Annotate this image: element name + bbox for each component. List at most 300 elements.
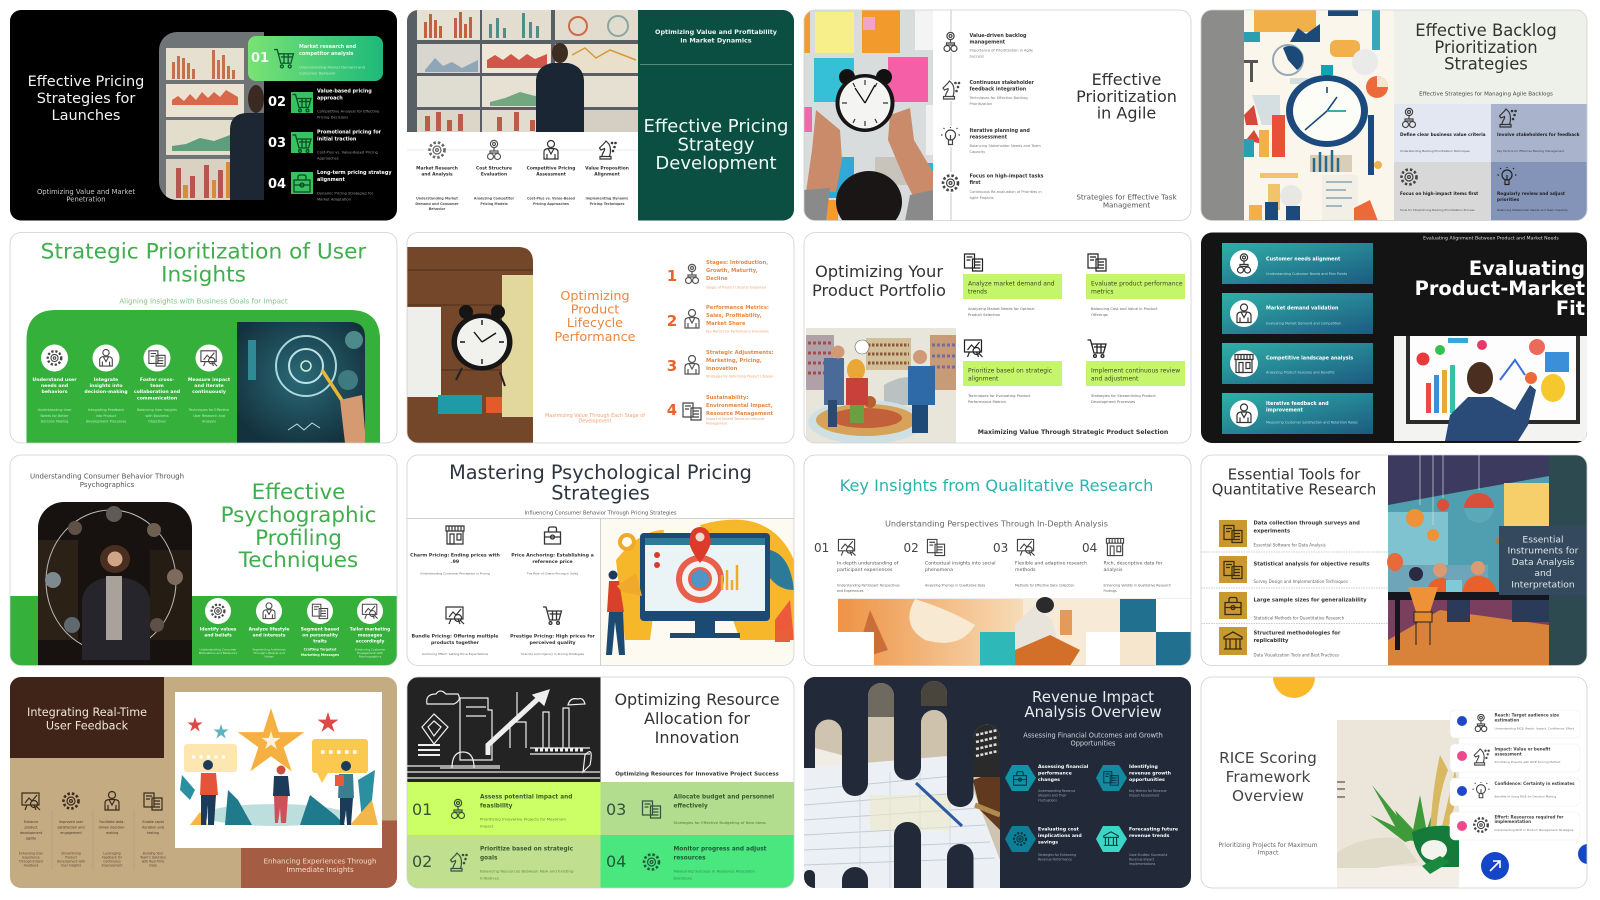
callout panel: Data Analysis xyxy=(1512,557,1575,568)
item 3: Innovation xyxy=(706,366,738,372)
item 2: reference price xyxy=(532,559,573,565)
benefit 2: User Insights xyxy=(61,864,81,868)
title: Techniques xyxy=(238,548,358,573)
item 3: Iterative planning and xyxy=(970,128,1030,134)
cell 03: effectively xyxy=(674,804,708,810)
item 02 xyxy=(268,88,380,120)
title: Psychographic xyxy=(221,503,376,528)
item 1 xyxy=(1005,764,1089,802)
cell 4: Regularly review and adjust xyxy=(1497,191,1565,197)
item 2 xyxy=(667,305,769,334)
benefit 1: Through Instant xyxy=(18,860,44,864)
cell 01: Impact xyxy=(480,824,494,828)
item 2: Performance Metrics: xyxy=(706,305,769,311)
button: arrow xyxy=(1481,852,1509,880)
step 2: Analyzing Competitor xyxy=(474,196,514,200)
item 04 xyxy=(268,170,392,202)
item 03: Approaches xyxy=(317,156,339,160)
cell 3 xyxy=(1394,162,1491,221)
cell 4: Balancing Stakeholder Needs and Team Capacity xyxy=(1497,208,1568,212)
step 01: 01 xyxy=(814,541,829,555)
slide 16 border xyxy=(1201,677,1587,888)
title: Quantitative Research xyxy=(1212,482,1376,498)
card: confidence xyxy=(1450,778,1580,806)
title: Prioritization xyxy=(1434,38,1538,57)
card: effort xyxy=(1450,812,1580,840)
tool 4 xyxy=(1219,627,1341,658)
panel: slide 2 pricing strategy development xyxy=(407,10,794,220)
item 2: 2 xyxy=(667,312,677,330)
card 4: and adjustment xyxy=(1091,376,1139,382)
card 3: Competitive landscape analysis xyxy=(1266,356,1353,362)
card 4: Measuring Customer Satisfaction and Retention Rates xyxy=(1266,420,1358,424)
benefit 1: Experience xyxy=(22,856,40,860)
step 4: Value Proposition xyxy=(585,166,629,172)
card 01: 01 xyxy=(251,51,269,66)
cell 04: Monitor progress and adjust xyxy=(674,846,767,852)
illustration: people around rating star xyxy=(175,692,382,848)
cell 2: Involve stakeholders for feedback xyxy=(1497,132,1580,138)
item 4 xyxy=(667,395,774,426)
card 3: Performance Metrics xyxy=(968,400,1006,404)
panel: slide 10 psychological pricing xyxy=(407,455,794,666)
item 3 xyxy=(1005,826,1082,862)
cell 01: 01 xyxy=(412,800,432,819)
green panel xyxy=(26,310,380,450)
title: Innovation xyxy=(655,728,739,747)
step 4: Alignment xyxy=(594,172,620,178)
item 2: Sales, Profitability, xyxy=(706,313,762,319)
column 2: Integrating Feedback xyxy=(88,408,124,412)
step 01: Understanding Participant Perspectives xyxy=(837,584,900,588)
panel: slide 7 product portfolio xyxy=(804,232,1191,444)
tool 1 xyxy=(1219,520,1360,548)
slide 6 border xyxy=(407,232,794,443)
column 3: Crafting Targeted xyxy=(304,648,337,652)
item 4: Focus on high-impact tasks xyxy=(970,174,1044,180)
column 4: and iterate xyxy=(194,383,224,389)
column 3: Balancing User Insights xyxy=(137,408,177,412)
benefit 4: Building Your xyxy=(143,852,164,856)
item 2: Identifying xyxy=(1129,764,1158,770)
column 1: Needs for Better xyxy=(40,414,69,418)
card 3: alignment xyxy=(968,376,999,382)
item 03: Cost-Plus vs. Value-Based Pricing xyxy=(317,150,378,154)
panel: slide 3 prioritization in agile xyxy=(804,10,1191,233)
tool 4: Structured methodologies for xyxy=(1254,630,1341,636)
step 01: and Experiences xyxy=(837,589,864,593)
card 3 xyxy=(1222,343,1373,384)
step 3: Competitive Pricing xyxy=(527,166,575,172)
benefit 3: driven decision- xyxy=(98,826,126,830)
column 4: Tailor marketing xyxy=(350,626,390,632)
benefit 4: Enable rapid xyxy=(142,820,164,824)
card: reach: estimation xyxy=(1494,718,1519,722)
step 01: participant experiences xyxy=(837,567,893,573)
item 3: Strategic Adjustments: xyxy=(706,350,774,356)
step 2 xyxy=(474,140,514,206)
title: Revenue Impact xyxy=(1032,688,1154,706)
title: Development xyxy=(655,153,777,174)
card 01 xyxy=(248,36,383,81)
column 3: with Business xyxy=(145,414,169,418)
card 4 xyxy=(1222,393,1373,434)
photo: woman in network of people xyxy=(38,502,192,672)
cell 2 xyxy=(1491,104,1587,162)
slide 5 border xyxy=(10,232,397,443)
subtitle: Strategies for Effective Task xyxy=(1076,192,1177,202)
panel: slide 5 user insights xyxy=(26,242,380,443)
illustration: line-art growth arrow xyxy=(407,677,600,782)
cell 02: Balancing Resources Between New and Existing xyxy=(480,868,574,874)
card 1: Customer needs alignment xyxy=(1266,256,1341,262)
tool 2: Survey Design and Implementation Techniques xyxy=(1254,579,1348,584)
item 4: Management xyxy=(706,422,728,426)
benefit 2 xyxy=(57,794,85,868)
step 03: Flexible and adaptive research xyxy=(1015,560,1087,566)
cell 02 xyxy=(407,835,600,888)
card: reach xyxy=(1450,710,1580,738)
item 3: 3 xyxy=(667,357,677,375)
green band xyxy=(10,596,397,666)
item 1: 1 xyxy=(667,267,677,285)
title: Strategies xyxy=(551,482,650,504)
benefit 1: development xyxy=(20,831,43,835)
slide 7 border xyxy=(804,232,1191,443)
card: reach: Understanding RICE: Reach, Impact, Confidence, Effort xyxy=(1494,726,1575,730)
cell 01: Assess potential impact and xyxy=(480,794,572,800)
title: Insights xyxy=(161,262,246,288)
subtitle: Optimizing Value and Market xyxy=(37,188,135,196)
column 2: Values xyxy=(264,654,274,658)
card 4 xyxy=(1086,340,1185,404)
subtitle: Psychographics xyxy=(80,481,135,489)
step 1 xyxy=(415,142,459,211)
slide 4 border xyxy=(1201,10,1587,220)
card 1 xyxy=(1222,243,1373,284)
title: Mastering Psychological Pricing xyxy=(449,461,752,484)
card 01: competitor analysis xyxy=(299,51,354,57)
benefit 4: Team's Solutions xyxy=(139,856,166,860)
step 4: Implementing Dynamic xyxy=(586,196,629,200)
rust callout xyxy=(241,820,397,888)
card 1: Understanding Customer Needs and Pain Points xyxy=(1266,272,1347,276)
slide 14 border xyxy=(407,677,794,888)
step 01: In-depth understanding of xyxy=(837,560,899,566)
callout panel: Interpretation xyxy=(1511,580,1575,590)
item 2: Continuous stakeholder xyxy=(970,80,1034,86)
item 3: Strategies for Optimizing Product Lifespan xyxy=(706,374,773,378)
title: Product xyxy=(571,302,619,318)
benefit 1 xyxy=(18,793,44,868)
column 3: on personality xyxy=(302,632,338,638)
title box: User Feedback xyxy=(46,720,129,732)
item 02: Value-based pricing xyxy=(317,88,372,94)
title: Lifecycle xyxy=(567,316,623,331)
item 03 xyxy=(268,130,382,160)
illustration: clock and data graphics xyxy=(1244,10,1394,221)
benefit 4: testing xyxy=(147,831,159,835)
photo: presenter at colorful board xyxy=(1394,336,1587,441)
column 4: continuously xyxy=(192,389,226,395)
item 3: products together xyxy=(431,640,480,646)
card: impact: assessment xyxy=(1494,752,1522,756)
column 2: Analyze lifestyle xyxy=(249,626,289,632)
tool 1: experiments xyxy=(1254,528,1290,534)
item 04: 04 xyxy=(268,177,286,192)
card: reach: Reach: Target audience size xyxy=(1494,712,1559,718)
column 2 xyxy=(84,344,128,424)
title: Optimizing xyxy=(560,289,630,304)
tool 4: Data Visualization Tools and Best Practices xyxy=(1254,652,1339,658)
item 3: savings xyxy=(1038,840,1058,846)
step 01 xyxy=(814,539,900,593)
column 4 xyxy=(188,344,231,424)
title: Framework xyxy=(1226,768,1310,786)
subtitle: Aligning Insights with Business Goals for Impact xyxy=(119,298,288,306)
item 2: Impact Assessment xyxy=(1129,794,1160,798)
card: confidence: Confidence: Certainty in estimates xyxy=(1494,781,1575,786)
benefit 3: making xyxy=(106,831,118,835)
subtitle: Development xyxy=(579,418,612,424)
title: Product-Market xyxy=(1415,277,1585,300)
column 2: Development Processes xyxy=(86,420,127,424)
slide 10 border xyxy=(407,455,794,666)
step 02 xyxy=(904,539,996,588)
item 1: Fluctuations xyxy=(1038,798,1057,802)
column 3: collaboration and xyxy=(134,389,180,395)
cell 3: Tools for Streamlining Backlog Prioritization Process xyxy=(1399,208,1475,212)
cell 02: goals xyxy=(480,856,498,862)
title: Overview xyxy=(1232,787,1304,805)
item 02: approach xyxy=(317,96,343,102)
item 2: Key Metrics for Performance Evaluation xyxy=(706,330,769,334)
item 4: Resource Management xyxy=(706,411,774,417)
benefit 2: engagement xyxy=(60,831,82,835)
cell 02: Initiatives xyxy=(480,876,499,880)
benefit 4: Data xyxy=(149,864,157,868)
card 4: Strategies for Streamlining Product xyxy=(1091,394,1156,398)
item 04: Dynamic Pricing Strategies for xyxy=(317,192,374,196)
item 2: revenue growth xyxy=(1129,770,1171,776)
item 1: Streams and Their xyxy=(1038,794,1067,798)
card 01: Market research and xyxy=(299,44,357,50)
item 04: Long-term pricing strategy xyxy=(317,170,392,176)
column 4: messages xyxy=(358,634,383,638)
card 2: Evaluating Market Demand and Competition xyxy=(1266,322,1341,326)
title: Effective Pricing xyxy=(644,116,788,137)
card: effort: implementation xyxy=(1494,819,1531,824)
item 3: implications and xyxy=(1038,833,1082,839)
card 3: Prioritize based on strategic xyxy=(968,368,1052,374)
cell 04: resources xyxy=(674,856,706,862)
photo: clock held over sticky notes xyxy=(804,10,933,233)
tool 2: Statistical analysis for objective results xyxy=(1254,562,1370,568)
item 1: Growth, Maturity, xyxy=(706,268,758,274)
benefit 3: Continuous xyxy=(103,860,121,864)
cell 03: 03 xyxy=(606,800,626,819)
subtitle: Effective Strategies for Managing Agile Backlogs xyxy=(1419,92,1553,98)
benefit 3: Facilitate data- xyxy=(99,820,125,824)
step 03: 03 xyxy=(993,541,1008,555)
subtitle: Management xyxy=(1103,200,1150,210)
step 02: 02 xyxy=(904,541,919,555)
item 1 xyxy=(667,260,768,290)
item 04: alignment xyxy=(317,177,346,183)
callout panel xyxy=(1499,526,1587,595)
benefit 2: Product xyxy=(65,856,78,860)
item 1: management xyxy=(970,40,1006,46)
column 1 xyxy=(32,344,77,424)
title: Strategic Prioritization of User xyxy=(41,240,366,264)
column 3: Marketing Messages xyxy=(301,653,339,657)
card: effort: Implementing RICE in Product Management Strategies xyxy=(1494,828,1574,832)
card: impact: Impact: Value or benefit xyxy=(1494,746,1550,752)
item 1: Assessing financial xyxy=(1038,764,1089,770)
title: Launches xyxy=(52,108,120,124)
item 02: Pricing Decisions xyxy=(317,116,348,120)
tool 1: Data collection through surveys and xyxy=(1254,520,1360,526)
subtitle: Understanding Consumer Behavior Through xyxy=(30,472,184,480)
item 1: .99 xyxy=(451,559,459,565)
item 4: Agile Projects xyxy=(970,196,994,200)
subtitle: Assessing Financial Outcomes and Growth xyxy=(1023,732,1163,740)
item 3: Capacity xyxy=(970,150,986,154)
cell 1 xyxy=(1394,104,1491,162)
title: Optimizing Resource xyxy=(614,690,780,709)
column 1: behaviors xyxy=(41,389,68,395)
benefit 1: Enhance xyxy=(24,820,38,824)
step 1: and Analysis xyxy=(421,172,453,178)
panel: slide 11 qualitative research xyxy=(804,455,1191,666)
item 1: Stages: Introduction, xyxy=(706,260,768,266)
item 3 xyxy=(941,126,1041,154)
item 02: Competitive Analysis for Effective xyxy=(317,110,380,114)
cell 1: Understanding Backlog Prioritization Techniques xyxy=(1400,149,1470,153)
title: in Agile xyxy=(1097,104,1156,122)
card 1: Analyzing Market Needs for Optimal xyxy=(968,307,1035,311)
step 04: Findings xyxy=(1104,589,1117,593)
item 04: Market Adaptation xyxy=(317,198,352,202)
step 3: Cost-Plus vs. Value-Based xyxy=(527,196,576,200)
card 2: metrics xyxy=(1091,288,1113,296)
item 1: Stages of Product Lifecycle Explained xyxy=(706,286,766,290)
subtitle: Understanding Perspectives Through In-Depth Analysis xyxy=(885,518,1108,528)
item 02: 02 xyxy=(268,95,286,110)
card 1 xyxy=(963,254,1062,317)
card 2 xyxy=(1222,293,1373,334)
title: Performance xyxy=(554,330,636,345)
panel: slide 15 revenue impact xyxy=(804,660,1191,899)
item 1: Understanding Revenue xyxy=(1038,789,1075,793)
item 4: Implementations xyxy=(1129,862,1156,866)
cell 3: Focus on high-impact items first xyxy=(1400,191,1478,197)
title: Optimizing Your xyxy=(815,262,943,281)
callout panel: Essential xyxy=(1522,534,1564,546)
sidebar subtitle: Optimizing Value and Profitability xyxy=(655,28,778,36)
step 03: Methods for Effective Data Collection xyxy=(1015,584,1074,588)
step 04: analysis xyxy=(1104,567,1123,573)
column 3 xyxy=(134,344,180,424)
panel: slide 13 real-time feedback xyxy=(10,677,397,888)
benefit 1: Feedback xyxy=(24,864,39,868)
card 4: improvement xyxy=(1266,408,1303,414)
benefit 3: Feedback for xyxy=(102,856,123,860)
column 2: Integrate xyxy=(94,377,118,383)
step 04: Rich, descriptive data for xyxy=(1104,560,1163,566)
title box xyxy=(10,677,164,758)
icon: cart xyxy=(274,50,293,68)
column 3: communication xyxy=(137,396,177,402)
photo: alarm clock on wooden desk xyxy=(407,247,533,443)
item 2: Key Metrics for Revenue xyxy=(1129,789,1167,793)
cell 01: feasibility xyxy=(480,804,513,810)
column 4: Measure impact xyxy=(188,377,231,383)
item 1: changes xyxy=(1038,777,1060,783)
card 2 xyxy=(1086,254,1185,317)
tool 3: Large sample sizes for generalizability xyxy=(1254,598,1367,604)
illustration: shoppers in store xyxy=(806,328,956,444)
item 4: Impact of Market Trends on Lifecycle xyxy=(706,417,764,421)
benefit 3: Improvement xyxy=(102,864,123,868)
cell 04 xyxy=(600,835,794,888)
item 4: Scarcity and Urgency in Pricing Strategies xyxy=(521,652,584,656)
item 3: Marketing, Pricing, xyxy=(706,358,762,364)
item 1 xyxy=(941,31,1034,58)
cell 02: Prioritize based on strategic xyxy=(480,846,574,852)
item 4: Revenue Impact xyxy=(1129,858,1155,862)
title: Product Portfolio xyxy=(812,281,946,300)
item 2: Prioritization xyxy=(970,102,992,106)
card: impact xyxy=(1450,744,1580,772)
column 2 xyxy=(249,598,289,658)
card 3: Techniques for Evaluating Product xyxy=(967,394,1031,398)
card 4: Iterative feedback and xyxy=(1266,401,1329,407)
tool 2 xyxy=(1219,556,1370,584)
benefit 4 xyxy=(139,793,166,868)
panel: slide 14 resource allocation xyxy=(407,677,794,888)
benefit 2: Development with xyxy=(57,860,85,864)
cell 2: Key Factors for Effective Backlog Management xyxy=(1497,149,1565,153)
photo: man viewing chart wall xyxy=(159,32,264,200)
column 3: Objectives xyxy=(148,420,166,424)
subtitle: Penetration xyxy=(66,196,106,204)
column 4: Analysis xyxy=(202,420,216,424)
item 2: feedback integration xyxy=(970,86,1027,92)
title: Effective xyxy=(1092,70,1161,89)
title: Strategy xyxy=(677,134,755,156)
slide 3 border xyxy=(804,10,1191,220)
step 02: phenomena xyxy=(925,567,953,573)
item 4: Case Studies: Successful xyxy=(1129,853,1168,857)
step 1: Understanding Market xyxy=(416,196,458,200)
column 4: Engagement with xyxy=(357,651,383,655)
benefit 3: Leveraging xyxy=(103,852,121,856)
panel: slide 9 psychographic profiling xyxy=(10,455,397,672)
item 1: Value-driven backlog xyxy=(970,33,1027,39)
step 02: Analyzing Themes in Qualitative Data xyxy=(925,584,985,588)
column 3: traits xyxy=(313,638,327,644)
cell 04: Measuring Success in Resource Allocation xyxy=(674,868,755,874)
panel: slide 4 backlog prioritization xyxy=(1201,10,1587,221)
benefit 2: Streamlining xyxy=(61,852,81,856)
illustration: monitor with target and marketer xyxy=(601,519,794,666)
step 3 xyxy=(527,140,576,206)
benefit 4: with Real-Time xyxy=(142,860,164,864)
step 4: Pricing Techniques xyxy=(590,202,624,206)
card: confidence: Benefits of Using RICE for Decision Making xyxy=(1494,794,1556,798)
card 01: Consumer Behavior xyxy=(299,72,336,76)
